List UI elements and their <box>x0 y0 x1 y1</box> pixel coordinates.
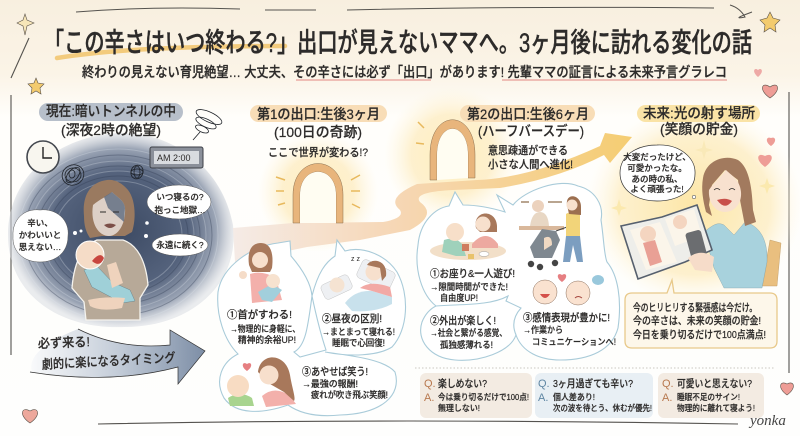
panel: FAQ 2: Q. <box>538 378 550 390</box>
panel: FAQ 2: 3ヶ月過ぎても辛い? <box>553 377 633 390</box>
thought bubble: top right <box>145 185 211 225</box>
text: first exit point 2: 睡眠で心回復! <box>332 337 385 348</box>
icon: digital clock <box>150 147 203 168</box>
thought bubble: top right: いつ寝るの? <box>156 192 204 202</box>
figure: mother waving with baby <box>239 243 282 303</box>
heading: first exit: (100日の奇跡) <box>274 124 362 140</box>
callout: future message: 今の辛さは、未来の笑顔の貯金! <box>633 314 761 327</box>
bubbles: second exit <box>417 183 620 360</box>
panel: FAQ 3: Q. <box>662 378 674 390</box>
arrow: turning point <box>30 329 205 384</box>
heading: future: 未来:光の射す場所 <box>643 105 755 121</box>
arrow: turning point: 劇的に楽になるタイミング <box>41 350 176 372</box>
text: second exit point 1: →隙間時間ができた! <box>430 281 508 292</box>
figure: baby playing with mother <box>430 213 506 260</box>
heading: present: (深夜2時の絶望) <box>61 122 161 138</box>
figure: baby faces <box>533 274 604 305</box>
panel: FAQ 3: 可愛いと思えない? <box>677 377 752 390</box>
subtitle: 終わりの見えない育児絶望… 大丈夫、その辛さには必ず「出口」があります! 先輩ママの証言による未来予言グラレコ <box>82 64 727 80</box>
text: second exit point 1: ①お座り&一人遊び! <box>430 267 515 280</box>
panel: FAQ 1: Q. <box>424 378 436 390</box>
tunnel swirl <box>8 133 234 327</box>
panel: FAQ 2: 次の波を待とう、休むが優先! <box>553 403 652 413</box>
bubbles: first exit <box>218 240 406 416</box>
panel: FAQ 1: 楽しめない? <box>438 377 487 390</box>
panel: FAQ 3 <box>658 373 764 418</box>
callout: future message: 今のヒリヒリする緊張感は今だけ。 <box>633 301 757 314</box>
heading: future: (笑顔の貯金) <box>660 121 738 137</box>
thought bubble: lower right <box>144 234 208 256</box>
thought bubble: left: 辛い、 <box>27 218 53 228</box>
figure: cafe and stroller <box>519 196 583 270</box>
thought bubble: left <box>13 210 82 262</box>
heading: present <box>39 103 183 138</box>
icon: scribbles <box>59 107 224 189</box>
panel: FAQ 3: 物理的に離れて寝よう! <box>677 403 755 413</box>
panel: FAQ 1: A. <box>424 392 434 404</box>
text: first exit point 2 <box>322 312 395 348</box>
text: first exit point 3: ③あやせば笑う! <box>302 365 368 378</box>
glow: arches <box>258 87 800 305</box>
speech bubble: future: よく頑張った! <box>630 184 684 194</box>
thought bubble: lower right: 永遠に続く? <box>156 240 204 250</box>
arch: first exit <box>276 164 360 223</box>
text: first exit point 2: ②昼夜の区別! <box>322 312 382 325</box>
signature: yonka <box>748 413 786 429</box>
heading: first exit: ここで世界が変わる!? <box>268 145 368 159</box>
heading: second exit: 第2の出口:生後6ヶ月 <box>467 106 589 122</box>
callout: future message <box>625 280 777 348</box>
text: first exit point 3: →最強の報酬! <box>302 378 358 389</box>
panel: FAQ 3: 睡眠不足のサイン! <box>677 392 740 402</box>
speech bubble: future: 可愛かったな。 <box>627 163 687 173</box>
text: first exit point 3 <box>302 365 388 400</box>
divider <box>415 367 775 369</box>
text: second exit point 2 <box>430 314 507 350</box>
speech bubble: future: 大変だったけど、 <box>623 152 691 162</box>
text: first exit point 1 <box>227 308 300 345</box>
text: first exit point 2: →まとまって寝れる! <box>322 326 395 337</box>
panel: FAQ 3: A. <box>662 392 672 404</box>
heading: second exit <box>460 105 595 171</box>
heading: second exit: 小さな人間へ進化! <box>488 158 573 171</box>
panel: FAQ 2 <box>535 373 653 418</box>
thought bubble: top right: 抱っこ地獄… <box>154 205 206 215</box>
panel: FAQ 2: A. <box>538 392 548 404</box>
text: second exit point 1 <box>430 267 515 303</box>
heading: second exit: 意思疎通ができる <box>488 143 568 157</box>
text: second exit point 1: 自由度UP! <box>440 292 478 303</box>
figure: sleeping mother and baby <box>320 256 397 311</box>
text: first exit point 3: 疲れが吹き飛ぶ笑顔! <box>311 389 388 400</box>
text: second exit point 3: →作業から <box>523 324 563 335</box>
figure: future mother with album <box>621 158 781 288</box>
figure: sleeping mother and baby: z z <box>351 256 360 263</box>
text: first exit point 1: 精神的余裕UP! <box>238 334 296 345</box>
road arrow <box>233 133 632 262</box>
heading: future <box>637 105 760 137</box>
heading: present: 現在:暗いトンネルの中 <box>46 103 176 119</box>
text: second exit point 3: ③感情表現が豊かに! <box>523 311 610 324</box>
icon: digital clock: AM 2:00 <box>157 153 191 163</box>
decorative sparkles and hearts: future <box>611 138 775 216</box>
title underline <box>57 46 285 58</box>
panel: FAQ 1 <box>420 373 532 418</box>
text: second exit point 3 <box>523 311 616 347</box>
text: first exit point 1: →物理的に身軽に、 <box>230 323 300 334</box>
speech bubble: future <box>620 145 696 201</box>
arrow: turning point: 必ず来る! <box>38 334 90 351</box>
thought bubble: left: かわいいと <box>19 230 61 240</box>
figure: smiling baby and mother <box>227 357 296 407</box>
panel: FAQ 1: 今は乗り切るだけで100点! <box>438 392 529 402</box>
icon: clock <box>27 141 59 173</box>
heading: first exit: 第1の出口:生後3ヶ月 <box>257 106 380 122</box>
arch: second exit <box>416 120 475 180</box>
figure: mother and baby <box>72 180 148 320</box>
speech bubble: future: あの時の私、 <box>631 174 683 184</box>
text: second exit point 2: →社会と繋がる感覚、 <box>430 327 507 338</box>
text: first exit point 1: ①首がすわる! <box>227 308 292 321</box>
panel: tunnel <box>8 103 234 327</box>
panel: FAQ 1: 無理しない! <box>438 403 480 413</box>
text: second exit point 2: ②外出が楽しく! <box>430 314 496 327</box>
text: second exit point 3: コミュニケーションへ! <box>532 337 616 347</box>
heading: first exit <box>250 105 387 159</box>
text: second exit point 2: 孤独感薄れる! <box>440 339 493 350</box>
callout: future message: 今日を乗り切るだけで100点満点! <box>633 328 766 341</box>
heading: second exit: (ハーフバースデー) <box>478 123 584 139</box>
panel: FAQ 2: 個人差あり! <box>553 392 595 402</box>
thought bubble: left: 思えない… <box>19 242 61 252</box>
